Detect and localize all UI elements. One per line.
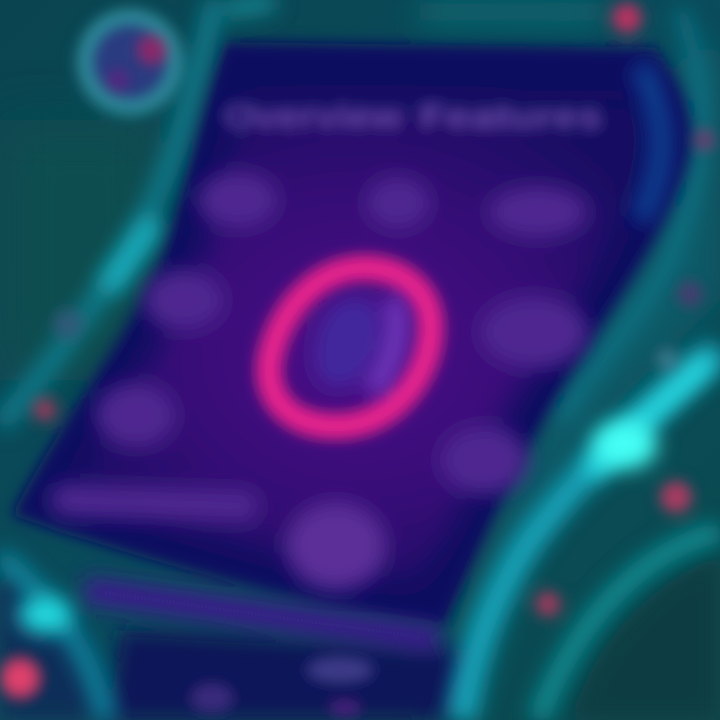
panel title: Features [420, 98, 602, 136]
feature blocks [50, 172, 588, 590]
bottom small blocks [190, 657, 374, 716]
bottom band [85, 590, 440, 640]
panel title [224, 98, 602, 136]
badge: top-left circle icon [84, 16, 176, 108]
panel: tilted document [12, 42, 692, 640]
central pink ring [269, 268, 431, 426]
panel title: Overview [224, 98, 403, 136]
